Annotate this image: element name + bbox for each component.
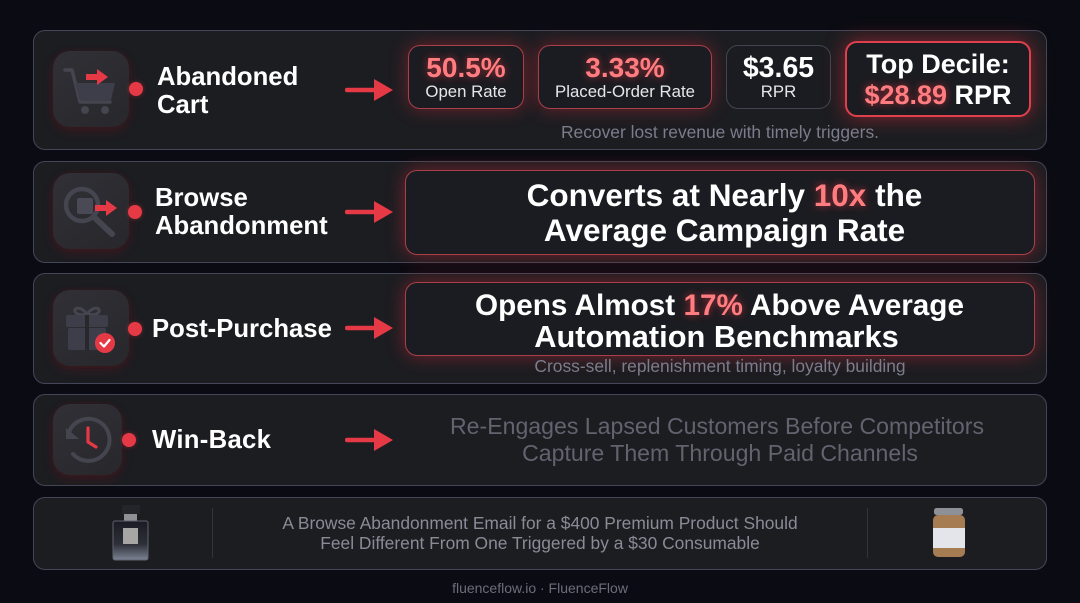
stat: placed-order rate xyxy=(538,45,712,109)
icon: perfume bottle xyxy=(112,505,148,560)
callout text: 17%: Opens Almost 17% Above Average xyxy=(475,289,964,322)
connector dot xyxy=(122,433,136,447)
text: premium vs consumable: Feel Different From One Triggered by a $30 Consumable xyxy=(320,533,760,553)
divider xyxy=(212,508,213,558)
icon: gift with check xyxy=(53,290,129,366)
label: post-purchase: Post-Purchase xyxy=(152,315,332,343)
callout box: post-purchase xyxy=(405,282,1035,356)
panel: win-back xyxy=(33,394,1047,486)
icon: magnifier with box xyxy=(53,173,129,249)
arrow xyxy=(345,429,393,451)
stat: RPR: $3.65 xyxy=(743,52,814,84)
stat: top decile xyxy=(845,41,1031,117)
connector dot xyxy=(129,82,143,96)
callout box: browse xyxy=(405,170,1035,255)
text: win-back description xyxy=(450,413,984,466)
panel: post-purchase xyxy=(33,273,1047,384)
label: browse abandonment: Abandonment xyxy=(155,212,328,240)
callout text: 17%: Automation Benchmarks xyxy=(534,319,899,354)
arrow xyxy=(345,79,393,101)
stat: RPR: RPR xyxy=(761,82,796,101)
icon: clock history xyxy=(53,404,122,475)
stat: open rate: Open Rate xyxy=(425,82,507,101)
stat: placed-order rate: Placed-Order Rate xyxy=(555,82,695,101)
stat: placed-order rate: 3.33% xyxy=(585,52,665,83)
label: browse abandonment: Browse xyxy=(155,184,248,212)
label: abandoned cart xyxy=(157,63,298,119)
label: win-back: Win-Back xyxy=(152,426,271,454)
panel: product price note xyxy=(33,497,1047,570)
text: win-back description: Capture Them Through Paid Channels xyxy=(522,440,918,466)
stat: open rate xyxy=(408,45,524,109)
label: abandoned cart: Cart xyxy=(157,91,208,119)
stat: top decile: $28.89 RPR xyxy=(864,80,1012,110)
text: win-back description: Re-Engages Lapsed Customers Before Competitors xyxy=(450,413,984,439)
divider xyxy=(867,508,868,558)
text: premium vs consumable xyxy=(282,513,798,553)
label: browse abandonment xyxy=(155,184,328,240)
stat: top decile: Top Decile: xyxy=(866,49,1010,79)
text: premium vs consumable: A Browse Abandonment Email for a $400 Premium Product Should xyxy=(282,513,798,533)
stat: open rate: 50.5% xyxy=(426,52,506,83)
caption: recover lost revenue: Recover lost revenue with timely triggers. xyxy=(561,122,879,142)
callout text: 10x xyxy=(527,177,922,248)
icon: jar xyxy=(933,508,965,557)
panel: abandoned cart xyxy=(33,30,1047,150)
callout text: 10x: Average Campaign Rate xyxy=(544,212,905,248)
caption: cross-sell: Cross-sell, replenishment timing, loyalty building xyxy=(534,356,906,376)
stat: RPR xyxy=(726,45,831,109)
icon: shopping cart xyxy=(53,51,129,127)
connector dot xyxy=(128,322,142,336)
label: abandoned cart: Abandoned xyxy=(157,63,298,91)
footer: fluenceflow.io · FluenceFlow xyxy=(452,580,628,596)
callout text: 17% xyxy=(475,289,964,354)
callout text: 10x: Converts at Nearly 10x the xyxy=(527,177,922,213)
arrow xyxy=(345,317,393,339)
connector dot xyxy=(128,205,142,219)
panel: browse abandonment xyxy=(33,161,1047,263)
arrow xyxy=(345,201,393,223)
